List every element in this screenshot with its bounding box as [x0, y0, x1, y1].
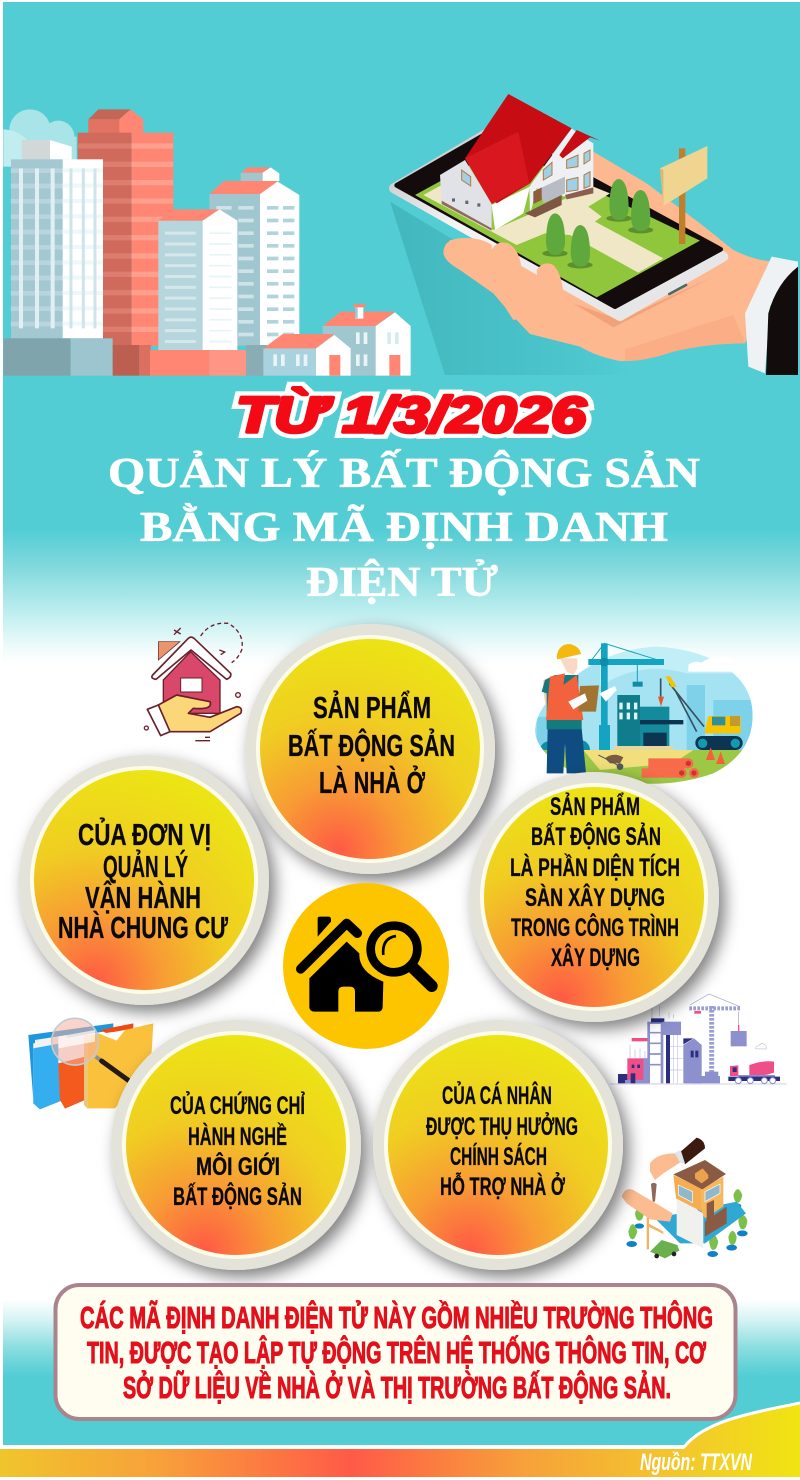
phone screen — [397, 127, 721, 307]
land plate — [655, 1202, 746, 1243]
water and trees — [626, 1189, 748, 1257]
panel: circle, housing support beneficiaries: CHÍNH SÁCH — [450, 1142, 547, 1171]
crane truck — [640, 676, 743, 750]
upper hand — [650, 1138, 705, 1202]
panel: circle, housing real estate product — [245, 624, 495, 874]
footer corner accent — [684, 1403, 800, 1477]
building: rear house — [323, 304, 411, 376]
tower crane — [588, 643, 664, 750]
title: main heading — [108, 449, 700, 606]
hand — [443, 152, 773, 361]
trees — [542, 179, 653, 268]
signpost — [647, 1217, 663, 1249]
icon: hand holding house — [144, 623, 242, 741]
shirt cuff — [745, 257, 798, 373]
wooden sign — [660, 146, 707, 244]
icon: buildings crane and mixer truck — [610, 994, 787, 1085]
worker — [542, 644, 617, 773]
cloud — [688, 657, 740, 672]
magnifier — [52, 1018, 138, 1087]
panel: circle, floor area product: TRONG CÔNG TRÌNH — [511, 912, 679, 942]
site background — [533, 643, 757, 787]
icon: hand handing over house key — [622, 1138, 748, 1258]
panel: circle, housing real estate product: SẢN PHẨM — [313, 690, 431, 725]
panel: circle, floor area product: LÀ PHẦN DIỆN TÍCH — [510, 852, 680, 882]
illustration: hand holding phone with house — [390, 94, 798, 375]
panel: circle, housing support beneficiaries: CỦA CÁ NHÂN — [442, 1080, 552, 1110]
driveway — [423, 185, 663, 273]
panel: circle, floor area product — [469, 772, 719, 1022]
title: main heading: BẰNG MÃ ĐỊNH DANH — [140, 503, 668, 551]
callout: explanation — [56, 1285, 736, 1419]
building: middle white tower — [158, 209, 237, 350]
panel: circle, floor area product: SÀN XÂY DỰNG — [525, 882, 665, 912]
tower crane — [689, 994, 747, 1076]
panel: circle, housing support beneficiaries: ĐƯỢC THỤ HƯỞNG — [426, 1111, 578, 1141]
hand shading — [625, 315, 745, 361]
panel: circle, apartment operators: QUẢN LÝ — [103, 849, 188, 884]
panel: circle, apartment operators: NHÀ CHUNG CƯ — [58, 910, 228, 945]
phone body — [394, 127, 723, 316]
panel: circle, housing real estate product: BẤT ĐỘNG SẢN — [288, 727, 455, 763]
icon: clouds — [3, 109, 77, 167]
icon: central house and magnifier badge — [283, 883, 449, 1049]
house — [440, 94, 600, 231]
panel: circle, floor area product: XÂY DỰNG — [551, 942, 640, 972]
lower hand — [622, 1189, 673, 1222]
building: bases — [3, 338, 266, 376]
building: tall white tower — [209, 167, 299, 346]
phone shadow — [390, 202, 633, 375]
icon: folders with magnifier — [28, 1018, 153, 1109]
building: front house — [263, 334, 351, 376]
title: date: TỪ 1/3/2026 — [236, 387, 587, 443]
building: red tower — [78, 109, 173, 346]
panel: circle, floor area product: SẢN PHẨM — [550, 791, 640, 821]
title: main heading: ĐIỆN TỬ — [306, 559, 499, 606]
buildings — [618, 1005, 720, 1083]
house — [673, 1160, 727, 1248]
title: date: TỪ 1/3/2026 — [236, 387, 587, 443]
lawn — [415, 147, 700, 297]
panel: circle, housing support beneficiaries: HỖ TRỢ NHÀ Ở — [440, 1171, 565, 1201]
title: main heading: QUẢN LÝ BẤT ĐỘNG SẢN — [108, 449, 700, 497]
car — [650, 1240, 679, 1258]
mixer truck — [728, 1061, 780, 1084]
panel: circle, apartment operators: VẬN HÀNH — [85, 879, 201, 915]
panel: circle, floor area product: BẤT ĐỘNG SẢN — [531, 821, 661, 851]
panel: circle, housing support beneficiaries — [373, 1020, 623, 1270]
pipes and cones — [642, 747, 725, 778]
jacket sleeve — [766, 267, 798, 375]
wheelbarrow — [598, 755, 623, 770]
panel: circle, housing real estate product: LÀ NHÀ Ở — [319, 764, 425, 800]
panel: circle, brokerage certificate: CỦA CHỨNG CHỈ — [170, 1090, 305, 1120]
shadow under phone — [573, 277, 713, 327]
panel: circle, apartment operators: CỦA ĐƠN VỊ — [78, 816, 211, 852]
panel: circle, brokerage certificate: HÀNH NGHỀ — [188, 1122, 287, 1151]
illustration: city buildings — [3, 109, 411, 376]
panel: circle, apartment operators — [19, 755, 269, 1005]
cloud — [756, 1043, 766, 1049]
fingers over phone — [443, 238, 577, 320]
footer bar — [0, 1449, 800, 1477]
panel: circle, brokerage certificate: MÔI GIỚI — [196, 1151, 280, 1181]
panel: circle, brokerage certificate — [111, 1020, 361, 1270]
icon: construction worker and site — [533, 643, 757, 787]
speaker — [669, 285, 686, 294]
panel: circle, brokerage certificate: BẤT ĐỘNG SẢN — [173, 1181, 302, 1211]
building: glass tower — [11, 140, 103, 338]
building under construction — [614, 695, 673, 750]
